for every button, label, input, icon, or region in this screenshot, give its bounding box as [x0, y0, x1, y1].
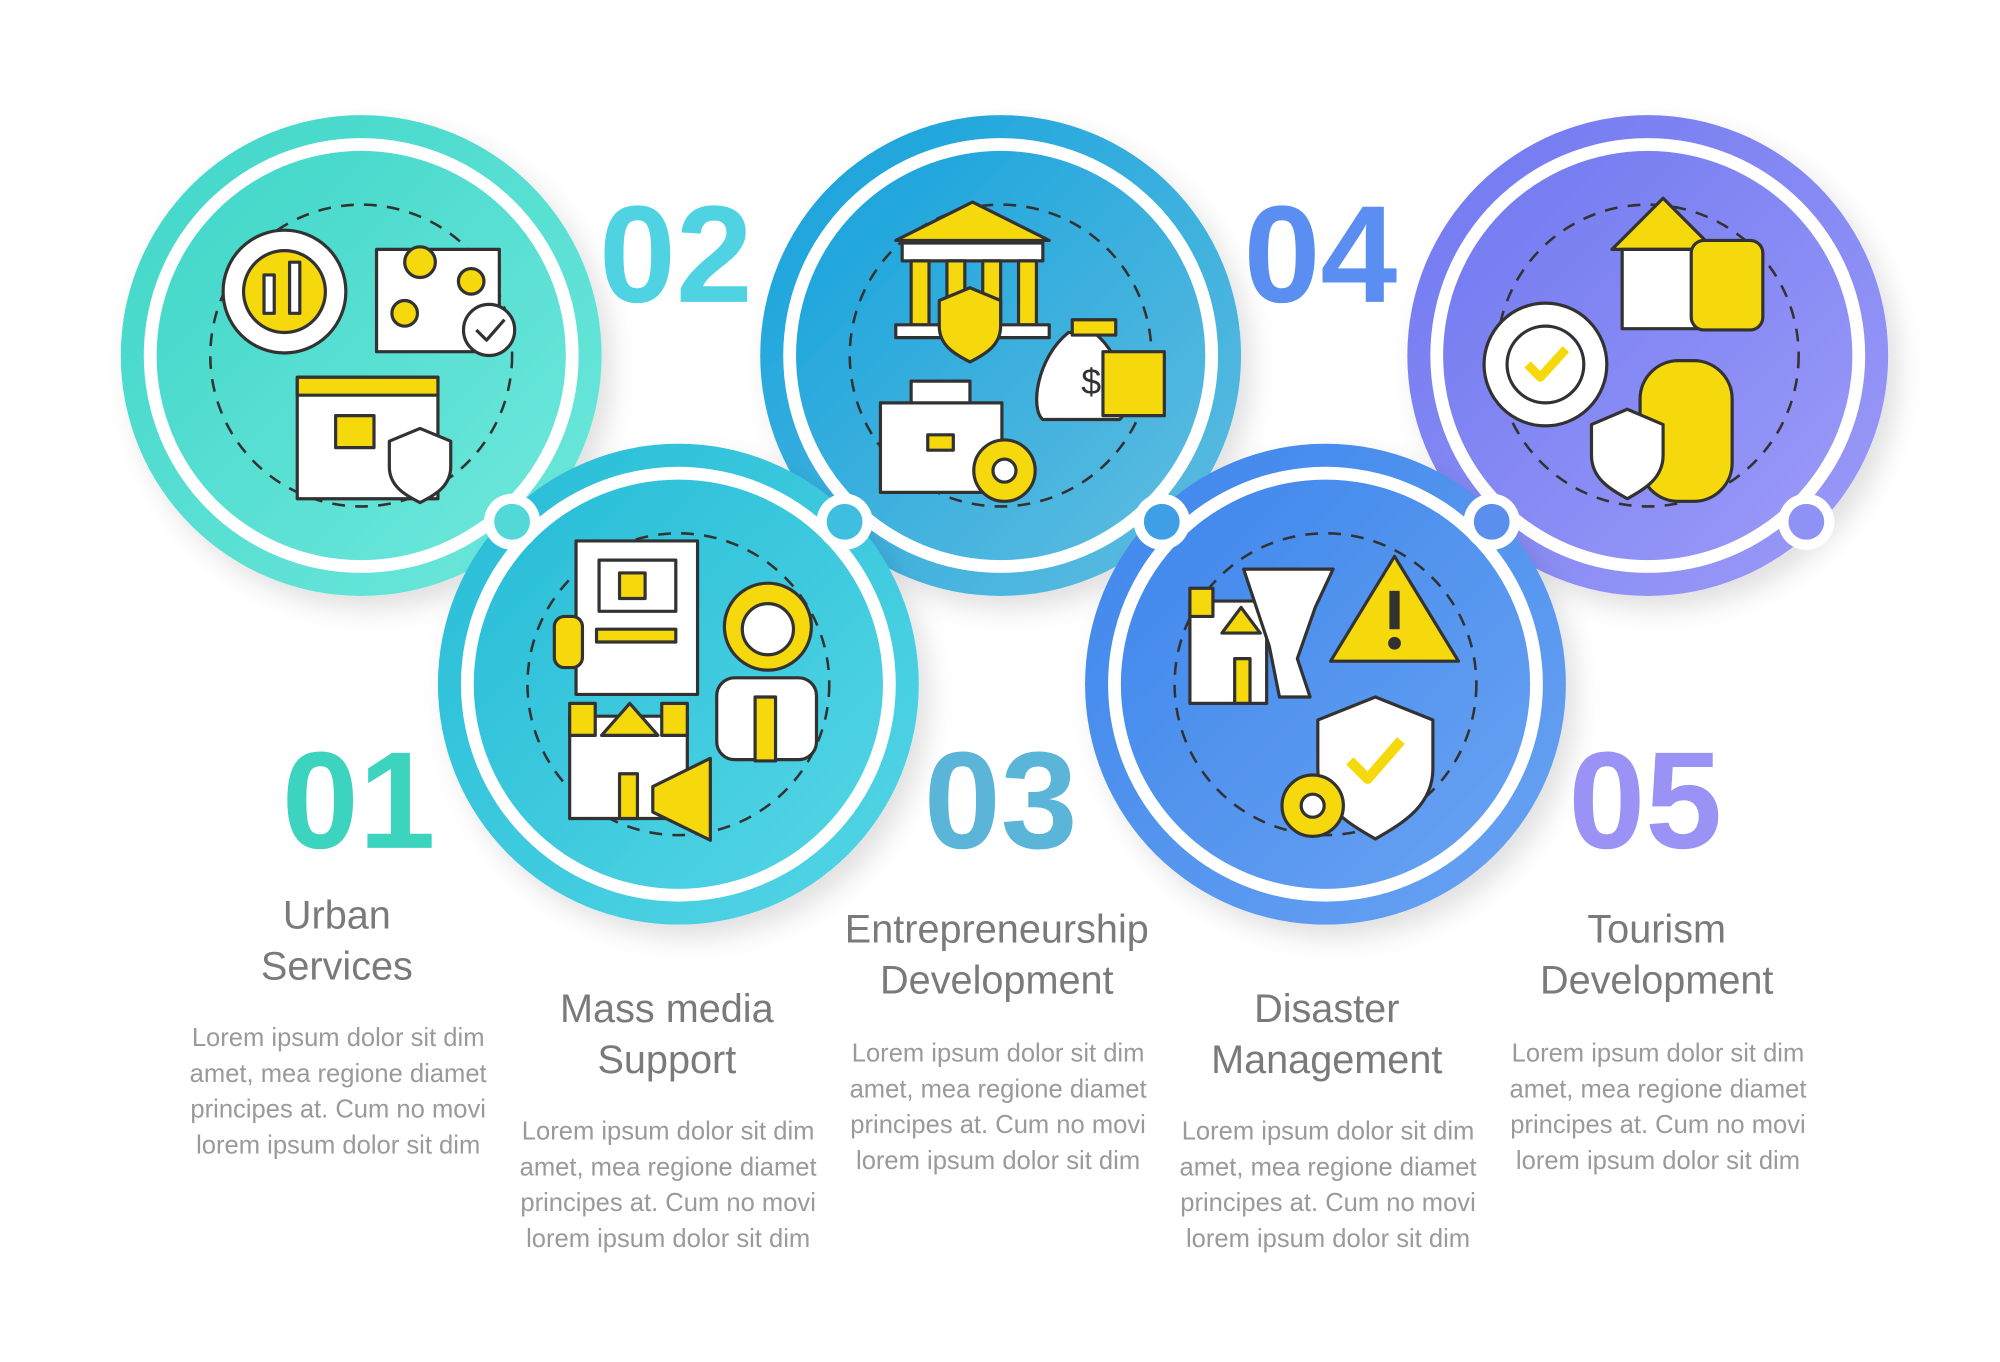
text block 04: Disaster	[1254, 987, 1399, 1031]
text block 05: Development	[1540, 959, 1773, 1003]
icon: plan shield	[297, 377, 451, 503]
text block 02	[520, 987, 817, 1253]
icon: castle megaphone	[570, 703, 710, 840]
text block 02: principes at. Cum no movi	[520, 1189, 816, 1217]
icon: castle tornado	[1190, 569, 1333, 703]
text block 03: Lorem ipsum dolor sit dim	[852, 1039, 1144, 1067]
text block 03	[845, 908, 1149, 1175]
text block 01: lorem ipsum dolor sit dim	[196, 1132, 480, 1160]
text block 01: Urban	[283, 893, 391, 937]
text block 03: amet, mea regione diamet	[850, 1075, 1147, 1103]
text block 03: Entrepreneurship	[845, 908, 1149, 952]
text block 01	[190, 893, 487, 1160]
text block 01: principes at. Cum no movi	[190, 1096, 486, 1124]
text block 03: Development	[880, 959, 1114, 1003]
text block 01: Services	[261, 945, 413, 989]
text block 03: principes at. Cum no movi	[850, 1111, 1146, 1139]
icon: newspaper	[554, 541, 698, 694]
icon: pagoda backpack	[1612, 198, 1763, 330]
icon: gear check	[1484, 303, 1607, 426]
text block 04: principes at. Cum no movi	[1180, 1189, 1476, 1217]
text block 02: Support	[597, 1038, 736, 1082]
icon: briefcase gear	[880, 381, 1035, 501]
text block 05: Tourism	[1587, 908, 1726, 952]
number 04: 04	[1244, 178, 1397, 332]
text block 04: Lorem ipsum dolor sit dim	[1182, 1117, 1474, 1145]
circle 4: disaster	[1085, 444, 1566, 925]
text block 05: lorem ipsum dolor sit dim	[1516, 1147, 1800, 1175]
number 01: 01	[282, 724, 436, 878]
icon: gear chart	[223, 230, 346, 353]
number 02: 02	[599, 178, 753, 332]
text block 04	[1180, 987, 1477, 1253]
icon: pharaoh shield	[1591, 361, 1732, 501]
icon: warning	[1331, 556, 1458, 661]
text block 05: Lorem ipsum dolor sit dim	[1512, 1039, 1804, 1067]
text block 02: Lorem ipsum dolor sit dim	[522, 1117, 814, 1145]
text block 03: lorem ipsum dolor sit dim	[856, 1147, 1140, 1175]
text block 04: lorem ipsum dolor sit dim	[1186, 1225, 1470, 1253]
text block 05	[1509, 908, 1806, 1175]
text block 02: Mass media	[560, 987, 775, 1031]
text block 02: amet, mea regione diamet	[520, 1153, 817, 1181]
icon: bank	[896, 202, 1049, 362]
number 03: 03	[924, 724, 1078, 878]
text block 01: Lorem ipsum dolor sit dim	[192, 1024, 485, 1052]
icon: money bag: $	[1081, 362, 1101, 402]
text block 04: Management	[1211, 1038, 1442, 1082]
icon: money bag	[1037, 320, 1164, 419]
text block 05: amet, mea regione diamet	[1509, 1075, 1806, 1103]
text block 01: amet, mea regione diamet	[190, 1060, 487, 1088]
icon: shield gear	[1282, 697, 1433, 839]
circle 1: urban services	[121, 115, 602, 596]
text block 02: lorem ipsum dolor sit dim	[526, 1225, 810, 1253]
connector dots	[484, 494, 1834, 550]
circle 5: tourism	[1407, 115, 1888, 596]
text block 04: amet, mea regione diamet	[1180, 1153, 1477, 1181]
text block 05: principes at. Cum no movi	[1510, 1111, 1806, 1139]
circle 2: mass media	[438, 444, 919, 925]
icon: reporter	[717, 583, 816, 761]
number 05: 05	[1568, 724, 1722, 878]
circle 3: entrepreneurship	[760, 115, 1241, 596]
icon: map	[377, 247, 515, 356]
